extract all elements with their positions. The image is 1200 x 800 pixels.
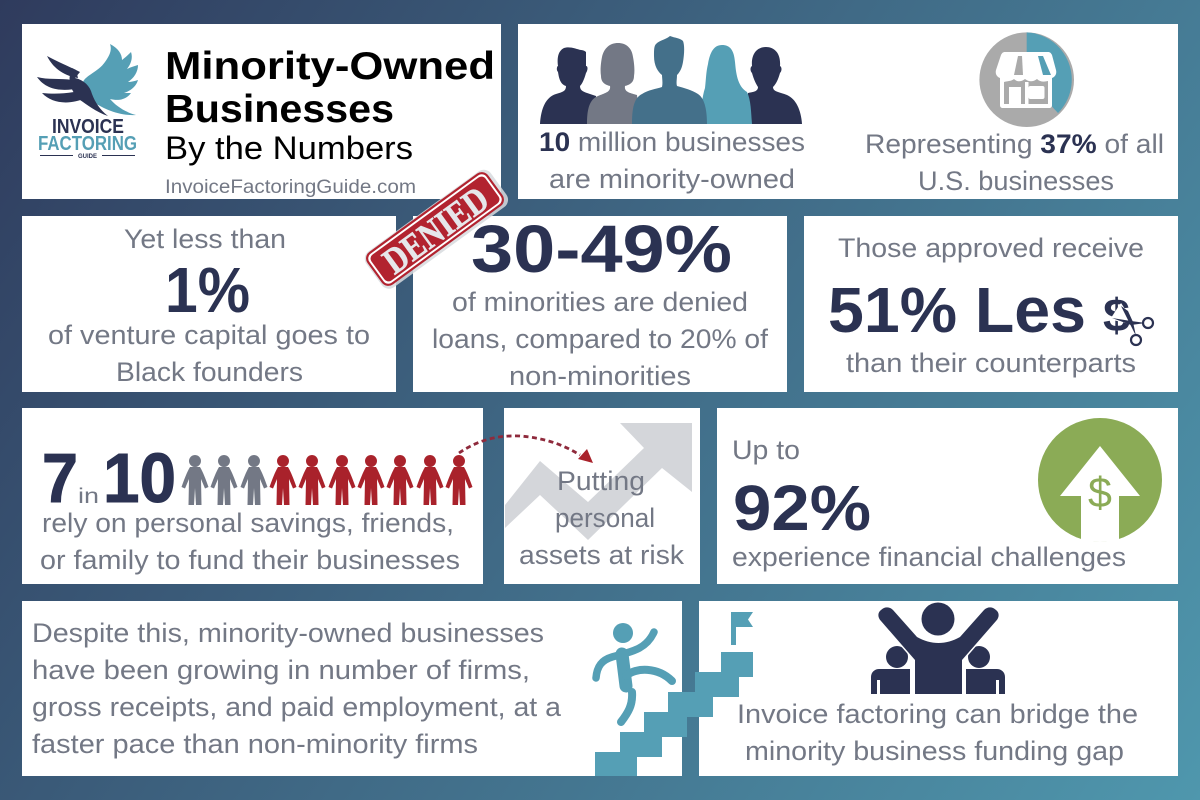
- stat: 7 in 10: 7: [42, 439, 78, 517]
- panel: venture capital: of venture capital goes to: [48, 320, 370, 350]
- logo wordmark: GUIDE: [78, 154, 97, 160]
- logo wordmark: [38, 116, 137, 160]
- icon: eagle logo: [37, 44, 138, 160]
- icon: scissors cutting dollar: [1103, 289, 1153, 345]
- icon: store pie chart: [979, 32, 1074, 127]
- icon: five silhouettes: [540, 36, 802, 124]
- title: [165, 45, 495, 166]
- panel: venture capital: Black founders: [116, 357, 303, 387]
- panel: loan denial: [413, 212, 787, 392]
- panel: growth despite challenges: faster pace than non-minority firms: [32, 729, 478, 759]
- panel: title and logo: [22, 24, 501, 199]
- text: 37 percent: U.S. businesses: [918, 166, 1114, 196]
- text: 10 million: 10 million businesses: [539, 127, 805, 157]
- stat: 30-49 percent: 30-49%: [471, 212, 732, 287]
- panel: personal assets at risk: Putting: [557, 466, 645, 496]
- panel: 92 percent financial challenges: Up to: [732, 435, 800, 465]
- title: By the Numbers: [165, 130, 413, 166]
- icon: runner climbing stairs: [595, 612, 753, 776]
- stat: 7 in 10: 10: [103, 439, 176, 517]
- panel: 7 in 10: [22, 408, 483, 584]
- icon: celebrating group: [871, 602, 1005, 694]
- panel: loan denial: loans, compared to 20% of: [432, 324, 769, 354]
- stat: 51 percent less: 51% Les: [828, 274, 1086, 346]
- text: 10 million: are minority-owned: [549, 164, 795, 194]
- panel: 7 in 10: or family to fund their businesses: [40, 545, 460, 575]
- panel: approved receive less: Those approved receive: [838, 233, 1144, 263]
- panel: 92 percent financial challenges: [717, 408, 1178, 584]
- icon: scissors cutting dollar: $: [1103, 289, 1130, 341]
- icon: ten people: [182, 455, 472, 505]
- panel: invoice factoring bridge: [699, 601, 1178, 776]
- title: Minority-Owned: [165, 45, 495, 88]
- text: 37 percent: Representing 37% of all: [865, 129, 1164, 159]
- panel: 92 percent financial challenges: experience financial challenges: [732, 542, 1126, 572]
- panel: growth despite challenges: have been growing in number of firms,: [32, 655, 530, 685]
- panel: loan denial: non-minorities: [509, 361, 691, 391]
- logo wordmark: INVOICE: [52, 116, 124, 138]
- panel: personal assets at risk: personal: [555, 503, 655, 533]
- panel: growth despite challenges: [22, 601, 753, 776]
- panel: personal assets at risk: [504, 408, 700, 584]
- panel: invoice factoring bridge: minority business funding gap: [745, 736, 1124, 766]
- panel: venture capital: [22, 216, 396, 392]
- panel: loan denial: of minorities are denied: [452, 287, 748, 317]
- title: Businesses: [165, 88, 394, 131]
- arrow: dashed curve to risk panel: [459, 436, 593, 463]
- panel: 10 million businesses and 37 percent: [518, 24, 1178, 199]
- stamp: denied: DENIED: [376, 179, 497, 282]
- panel: invoice factoring bridge: Invoice factoring can bridge the: [737, 699, 1138, 729]
- website: InvoiceFactoringGuide.com: [165, 177, 416, 198]
- panel: growth despite challenges: gross receipts, and paid employment, at a: [32, 692, 562, 722]
- stat: 1 percent: 1%: [165, 254, 250, 326]
- logo wordmark: FACTORING: [38, 133, 137, 155]
- panel: personal assets at risk: assets at risk: [519, 540, 685, 570]
- icon: zigzag rising arrow: [505, 423, 692, 540]
- panel: venture capital: Yet less than: [124, 224, 286, 254]
- stat: 7 in 10: [42, 439, 176, 517]
- panel: approved receive less: than their counterparts: [846, 348, 1136, 378]
- text: 37 percent: [865, 129, 1164, 196]
- stat: 7 in 10: in: [78, 485, 99, 508]
- icon: green circle arrow with dollar: [1038, 418, 1162, 542]
- text: 10 million: [539, 127, 805, 194]
- icon: green circle arrow with dollar: $: [1088, 469, 1112, 517]
- panel: 7 in 10: rely on personal savings, friends,: [42, 508, 454, 538]
- stat: 92 percent: 92%: [733, 472, 871, 544]
- panel: approved receive less: [804, 216, 1178, 392]
- panel: growth despite challenges: Despite this, minority-owned businesses: [32, 618, 544, 648]
